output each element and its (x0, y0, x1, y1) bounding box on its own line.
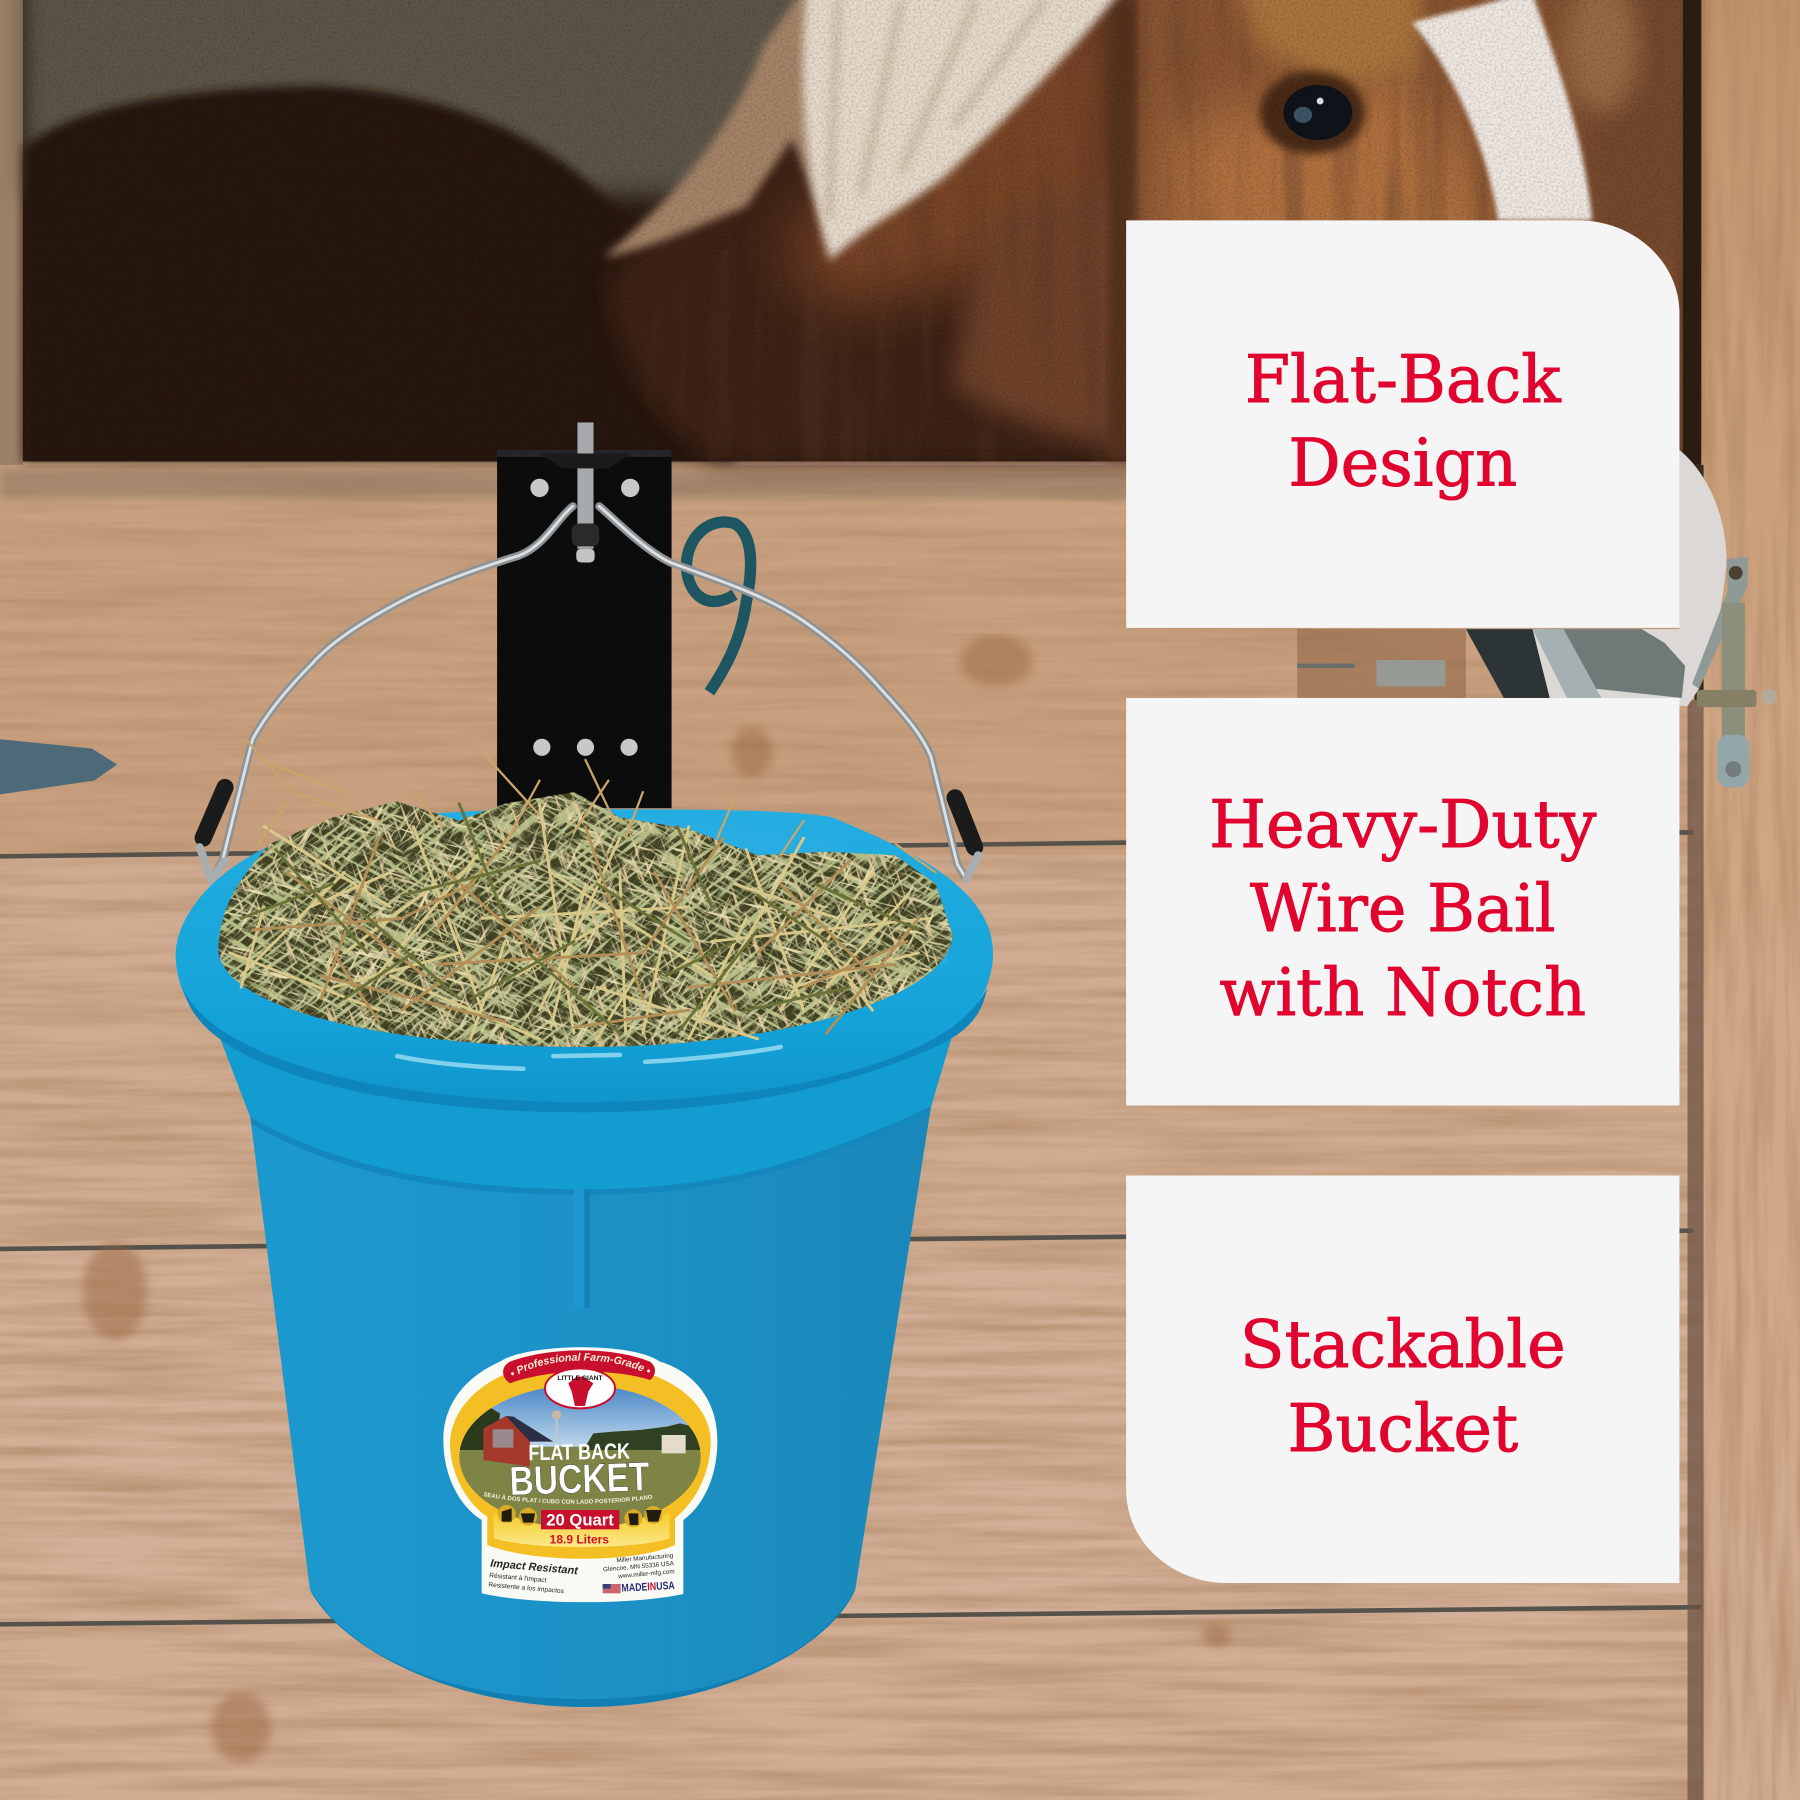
impact resistant text: Impact Resistant (490, 1558, 580, 1577)
white blaze (1412, 0, 1592, 220)
stall number 9 (686, 522, 751, 692)
upper band (220, 1033, 953, 1189)
wood knots (83, 636, 1231, 1762)
maker text (602, 1552, 676, 1581)
card text: with Notch (1220, 955, 1586, 1031)
farm scene (459, 1388, 701, 1524)
dark gap beside door post (1683, 0, 1701, 465)
blonde mane wisps (603, 0, 872, 258)
label backing (443, 1347, 717, 1602)
feature card: stackable bucket (1126, 1176, 1679, 1583)
white mane (803, 0, 1123, 261)
liters: 18.9 Liters (550, 1532, 609, 1546)
barn (483, 1416, 530, 1467)
forelock (1234, 0, 1423, 86)
impact resistant text: Resistente a los impactos (488, 1582, 565, 1595)
red banner (503, 1350, 655, 1383)
product label (443, 1347, 718, 1602)
hook bolt (540, 422, 631, 562)
face (1131, 0, 1688, 461)
card text: Flat-Back (1245, 342, 1561, 418)
maker text: www.miller-mfg.com (617, 1568, 675, 1580)
hay filling (218, 740, 953, 1047)
made in usa (603, 1580, 675, 1595)
20 quart panel (493, 1513, 670, 1547)
door latch (1692, 557, 1777, 788)
banner text: • Professional Farm-Grade • (511, 1352, 650, 1376)
stall opening with horse (23, 0, 1704, 700)
card text: Stackable (1240, 1307, 1566, 1383)
trees (460, 1408, 500, 1450)
black wall bracket (497, 422, 672, 808)
plank 2 (0, 859, 1693, 1247)
right grip (955, 798, 975, 847)
feature card: heavy-duty wire bail (1126, 698, 1679, 1105)
center rib (574, 1189, 590, 1308)
card text: Bucket (1287, 1391, 1518, 1467)
made in usa: MADEINUSA (621, 1580, 675, 1595)
french spanish subtitle: SEAU À DOS PLAT / CUBO CON LADO POSTERIOR PLANO (484, 1492, 652, 1504)
door hinge (0, 739, 117, 794)
dark cheek band (1108, 0, 1136, 459)
rim highlights (397, 1047, 781, 1069)
chestnut horse neck (608, 0, 1687, 461)
feature card: flat-back design (1126, 220, 1679, 628)
plank 1 (0, 465, 1693, 855)
impact resistant text: Résistant à l'impact (489, 1572, 547, 1584)
card text: Wire Bail (1250, 871, 1556, 947)
horse muzzle (1465, 450, 1727, 706)
side of head right of blaze (1561, 0, 1688, 264)
maker text: Miller Manufacturing (616, 1552, 674, 1564)
flat back title: FLAT BACK (528, 1438, 630, 1465)
maker text: Glencoe, MN 55336 USA (603, 1560, 675, 1573)
plank gaps (0, 832, 1704, 1624)
left grip (203, 788, 225, 838)
wood strip detail between cards (1297, 629, 1466, 698)
eye (1259, 71, 1365, 154)
yellow border (450, 1366, 711, 1559)
animal icons (498, 1505, 662, 1527)
rim interior (218, 817, 951, 964)
card text: Heavy-Duty (1209, 787, 1597, 863)
impact resistant text (488, 1558, 580, 1596)
card text: Design (1288, 426, 1517, 502)
capacity badge: 20 Quart (546, 1511, 614, 1530)
logo: LITTLE GIANT (557, 1375, 603, 1382)
left post (0, 0, 23, 465)
dark horse silhouette (23, 86, 735, 461)
bucket title: BUCKET (509, 1453, 650, 1504)
blue flat-back bucket (176, 809, 993, 1707)
jaw lobe (953, 172, 1131, 445)
logo (545, 1368, 615, 1408)
bucket rim (176, 809, 993, 1110)
right door post (1701, 0, 1800, 1800)
plank 3 (0, 1249, 1699, 1619)
plank 4 (0, 1621, 1704, 1800)
bucket body (220, 1033, 953, 1707)
stall interior (23, 0, 1685, 461)
straw strands (230, 740, 936, 1039)
wire bail handle (200, 506, 978, 879)
